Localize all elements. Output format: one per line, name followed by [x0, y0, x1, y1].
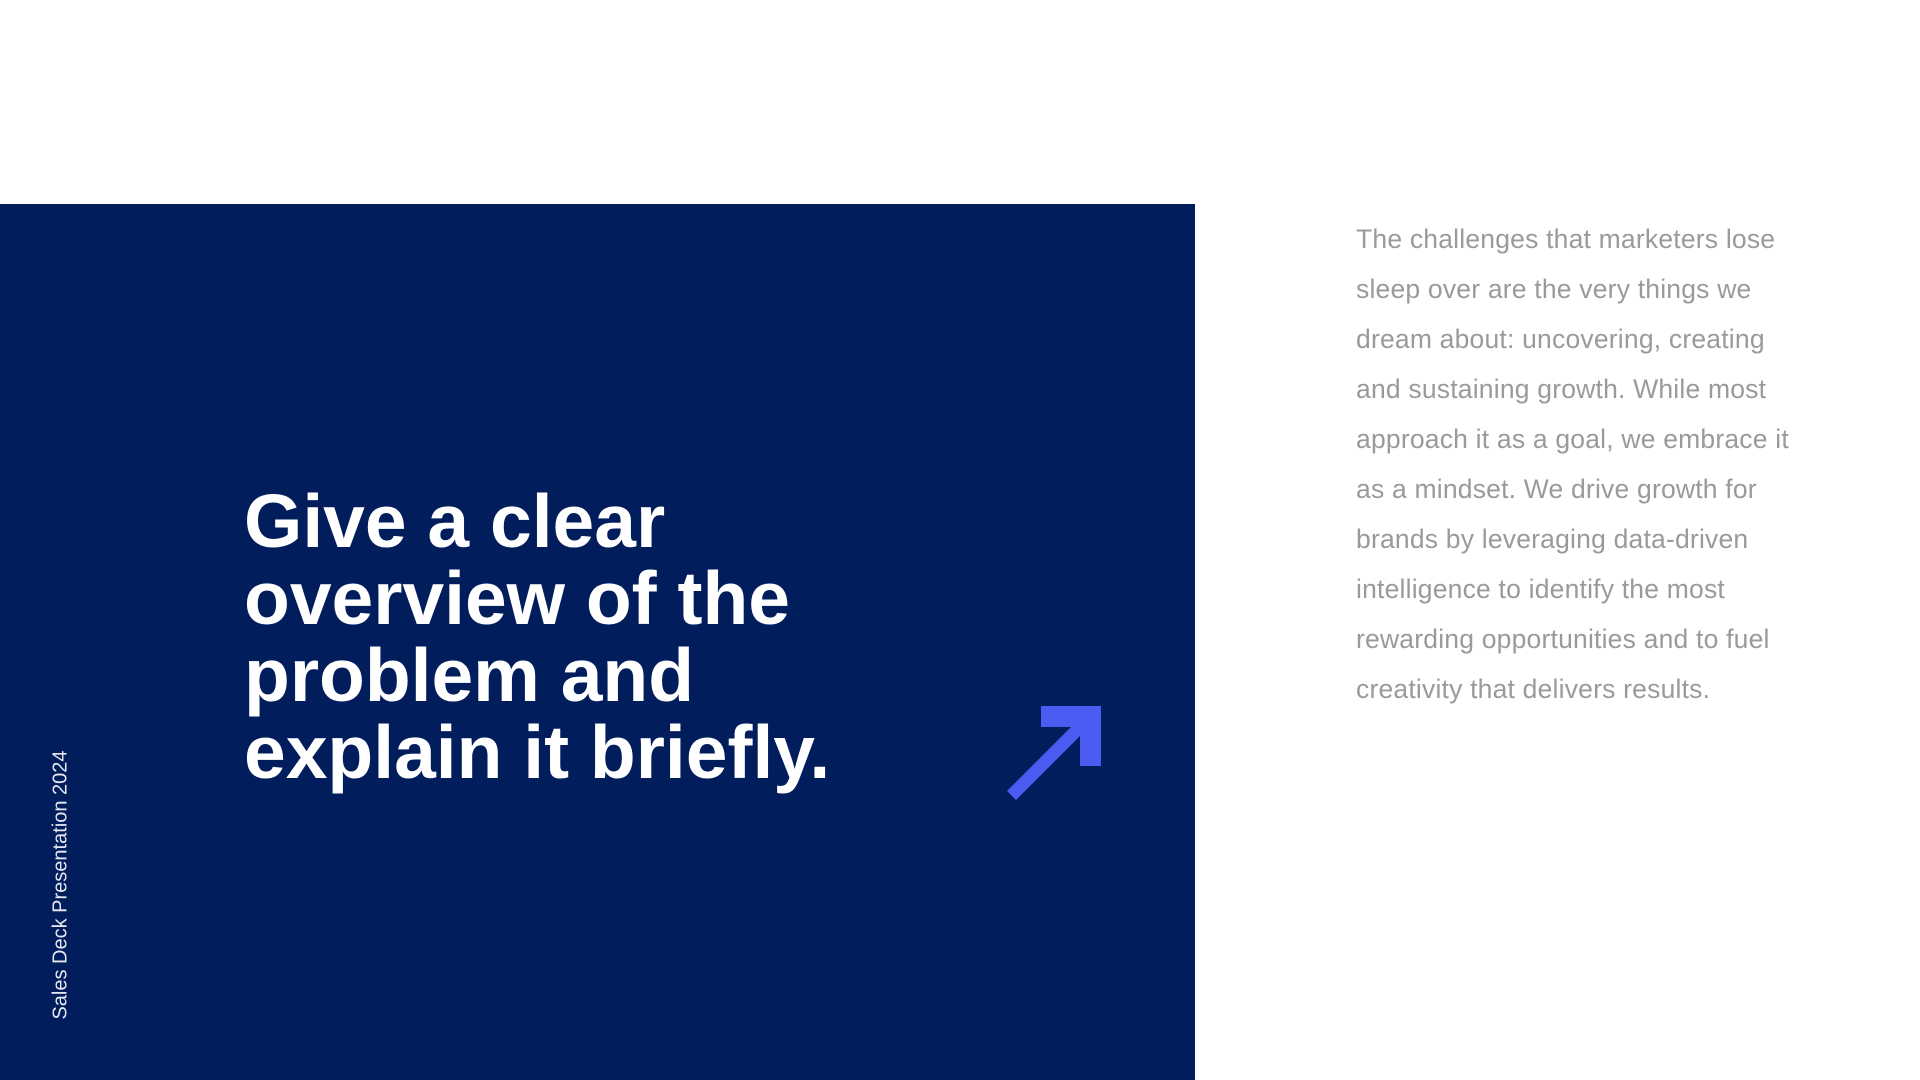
title: explain it briefly. [244, 710, 830, 794]
panel: navy block [0, 204, 1195, 1080]
text block: description: sleep over are the very things we [1356, 274, 1751, 304]
text block: description: dream about: uncovering, creating [1356, 324, 1765, 354]
text block: description: brands by leveraging data-driven [1356, 524, 1748, 554]
text block: description: intelligence to identify the most [1356, 574, 1725, 604]
title: overview of the [244, 556, 790, 640]
text block: description: The challenges that marketers lose [1356, 224, 1775, 254]
vertical footer label: Sales Deck Presentation 2024 [50, 750, 72, 1020]
text block: description: as a mindset. We drive growth for [1356, 474, 1757, 504]
text block: description: creativity that delivers results. [1356, 674, 1710, 704]
title: problem and [244, 633, 694, 717]
text block: description: and sustaining growth. While most [1356, 374, 1766, 404]
text block: description: approach it as a goal, we embrace it [1356, 424, 1789, 454]
title [244, 479, 830, 794]
icon: arrow up-right [1007, 706, 1101, 800]
text block: description [1356, 224, 1789, 704]
text block: description: rewarding opportunities and to fuel [1356, 624, 1770, 654]
title: Give a clear [244, 479, 665, 563]
